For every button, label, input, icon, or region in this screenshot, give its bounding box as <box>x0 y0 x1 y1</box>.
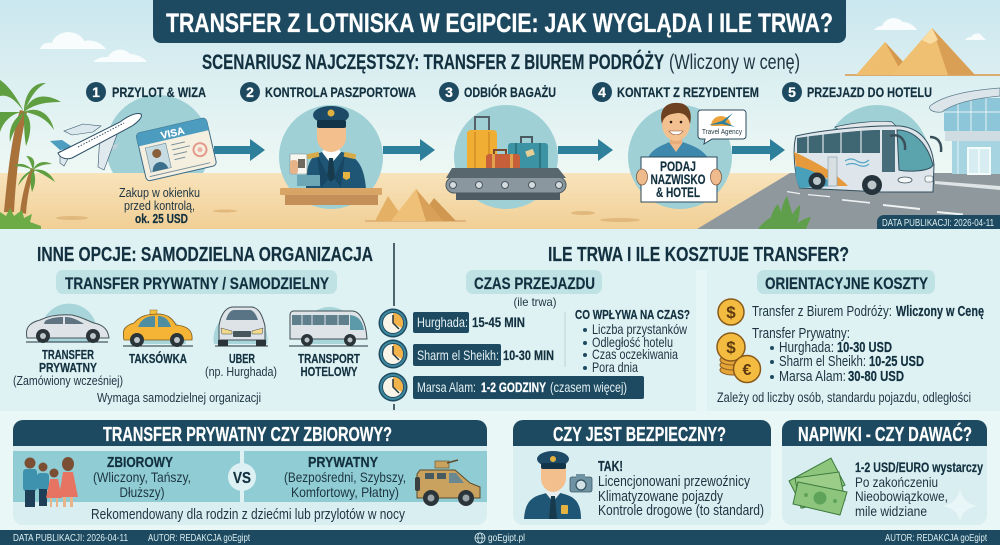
road <box>697 173 1000 229</box>
note: wymaga organizacji: Wymaga samodzielnej organizacji <box>97 390 261 405</box>
text: napiwki: Po zakończeniu <box>855 474 938 490</box>
text: zbiorowy: (Wliczony, Tańszy, <box>93 469 191 485</box>
icon: airport terminal <box>930 88 1000 174</box>
step 3 header: ODBIÓR BAGAŻU <box>464 83 556 100</box>
icon: family <box>23 457 78 507</box>
cost: transfer prywatny: Transfer Prywatny: <box>752 326 850 342</box>
icon: visa card <box>136 117 217 181</box>
row: hurghada: 15-45 MIN <box>472 314 525 330</box>
vehicle: uber <box>215 307 268 346</box>
text: prywatny: Komfortowy, Płatny) <box>291 484 399 500</box>
icon: coin stack: € <box>743 362 752 379</box>
sign: podaj nazwisko i hotel: PODAJ <box>660 159 696 174</box>
text: tak: Klimatyzowane pojazdy <box>598 489 724 505</box>
step 5 header: PRZEJAZD DO HOTELU <box>807 84 932 100</box>
footer: DATA PUBLIKACJI: 2026-04-11 <box>13 532 128 544</box>
icon: officer <box>524 451 581 519</box>
icon: pyramids top right <box>845 28 1000 75</box>
text: zbiorowy: Dłuższy) <box>120 484 164 500</box>
icon: banknotes <box>789 458 847 515</box>
sign: podaj nazwisko i hotel: NAZWISKO <box>650 172 706 187</box>
text: zbiorowy: ZBIOROWY <box>107 454 173 471</box>
icon: airplane <box>50 113 141 170</box>
text: rekomendowany: Rekomendowany dla rodzin z dziećmi lub przylotów w nocy <box>91 507 406 523</box>
title banner <box>153 0 846 43</box>
list: co wpływa na czas: CO WPŁYWA NA CZAS? <box>575 307 690 322</box>
note: ile trwa: (ile trwa) <box>514 295 556 309</box>
vehicle labels: HOTELOWY <box>300 365 358 379</box>
teal step circles <box>106 95 929 209</box>
icon: globe <box>475 533 485 543</box>
arrow 3 to 4 <box>558 139 613 161</box>
vehicle: taxi <box>123 310 193 347</box>
pill: orientacyjne koszty <box>757 270 935 294</box>
arrow 2 to 3 <box>383 139 435 161</box>
pill: orientacyjne koszty: ORIENTACYJNE KOSZTY <box>765 274 929 293</box>
subtitle: (Wliczony w cenę) <box>669 51 800 74</box>
clouds <box>40 18 986 62</box>
pill: transfer prywatny <box>56 270 337 294</box>
sign: podaj nazwisko i hotel <box>636 157 722 202</box>
step 2 header: KONTROLA PASZPORTOWA <box>265 84 416 100</box>
vehicle labels: (np. Hurghada) <box>205 365 277 379</box>
icon: armored vehicle <box>415 460 480 506</box>
step 1 caption: Zakup w okienku <box>119 185 200 200</box>
text: napiwki: Nieobowiązkowe, <box>855 488 948 504</box>
row: hurghada: Hurghada: <box>417 314 468 330</box>
icon: vs badge: VS <box>233 470 251 487</box>
icon: vs badge <box>228 463 256 491</box>
cost: transfer prywatny: Sharm el Sheikh: <box>779 354 866 370</box>
step 1 caption <box>119 185 200 226</box>
panel: czy bezpieczny <box>513 420 771 525</box>
text: napiwki: mile widziane <box>855 503 927 519</box>
step 4 header: KONTAKT Z REZYDENTEM <box>617 84 759 100</box>
step 3 header: 3 <box>445 84 453 100</box>
row: sharm el sheikh: Sharm el Sheikh: <box>417 347 499 363</box>
arrow 4 to 5 <box>732 139 785 161</box>
cost: transfer prywatny: Hurghada: <box>779 340 834 356</box>
text: prywatny: (Bezpośredni, Szybszy, <box>284 469 406 485</box>
step 2 header <box>240 82 416 102</box>
row: marsa alam: 1-2 GODZINY <box>481 379 546 395</box>
heading: inne opcje: INNE OPCJE: SAMODZIELNA ORGANIZACJA <box>37 244 373 266</box>
icon: small pyramids <box>365 189 466 221</box>
pill: transfer prywatny: TRANSFER PRYWATNY / SAMODZIELNY <box>65 274 330 293</box>
step 4 header <box>592 82 759 102</box>
speech bubble: travel agency <box>698 110 746 144</box>
step 5 header <box>782 82 932 102</box>
vehicle circles <box>41 304 356 344</box>
step 1 header: 1 <box>92 84 100 100</box>
icon: desk <box>280 188 382 205</box>
vehicle labels: TAKSÓWKA <box>129 351 187 366</box>
step 1 header <box>86 82 206 102</box>
icon: dollar coin <box>718 299 744 325</box>
vehicle: private car <box>26 315 109 343</box>
icon: coin stack: $ <box>726 338 736 357</box>
cost: transfer prywatny <box>752 326 924 385</box>
cost: transfer prywatny: Marsa Alam: <box>779 369 846 385</box>
footer <box>0 530 1000 545</box>
row: hurghada <box>413 312 525 333</box>
icon: agave plant <box>758 196 811 229</box>
row: marsa alam: Marsa Alam: <box>417 379 476 395</box>
text: prywatny <box>284 454 406 500</box>
vehicle labels: TRANSFER <box>42 348 94 362</box>
cost: transfer prywatny: 10-25 USD <box>869 354 924 370</box>
subtitle: SCENARIUSZ NAJCZĘSTSZY: TRANSFER Z BIUREM PODRÓŻY <box>202 50 664 74</box>
icon: visa card: VISA <box>160 126 186 142</box>
list: co wpływa na czas: Odległość hotelu <box>592 334 673 350</box>
icon: clock 1 <box>378 308 408 338</box>
icon: palm trees <box>0 80 61 229</box>
panel: czy bezpieczny: CZY JEST BEZPIECZNY? <box>553 424 726 446</box>
arrow 1 to 2 <box>214 139 265 161</box>
cost: biuro podróży: Transfer z Biurem Podróży: <box>752 304 892 320</box>
text: zbiorowy <box>93 454 191 500</box>
cost: transfer prywatny: 10-30 USD <box>837 340 892 356</box>
vehicle: hotel bus <box>289 311 368 346</box>
text: tak: Kontrole drogowe (to standard) <box>598 503 764 519</box>
icon: coin stack <box>717 333 760 382</box>
cost: transfer prywatny: 30-80 USD <box>848 369 904 385</box>
footer: goEgipt.pl <box>488 532 525 544</box>
icon: coach bus <box>794 121 941 195</box>
panel: napiwki <box>782 420 987 525</box>
icon: clock 2 <box>378 340 408 368</box>
text: tak: Licencjonowani przewoźnicy <box>598 474 751 490</box>
vehicle labels: TRANSPORT <box>298 352 360 366</box>
icon: dollar coin: $ <box>726 303 736 322</box>
icon: camera <box>570 474 592 492</box>
step 1 header: PRZYLOT & WIZA <box>112 84 206 100</box>
text: tak: TAK! <box>598 459 623 475</box>
title banner: TRANSFER Z LOTNISKA W EGIPCIE: JAK WYGLĄDA I ILE TRWA? <box>166 8 833 38</box>
pill: czas przejazdu: CZAS PRZEJAZDU <box>474 274 595 293</box>
vehicle labels <box>13 348 360 388</box>
step 2 header: 2 <box>246 84 254 100</box>
icon: resident <box>648 103 708 158</box>
step 4 header: 4 <box>598 84 606 100</box>
pill: czas przejazdu <box>466 270 602 294</box>
text: napiwki <box>855 460 983 519</box>
row: marsa alam: (czasem więcej) <box>550 379 627 395</box>
list: co wpływa na czas: Pora dnia <box>592 359 638 375</box>
list: co wpływa na czas <box>575 307 690 375</box>
text: prywatny: PRYWATNY <box>308 454 378 471</box>
icon: clock 3 <box>378 372 408 402</box>
text: tak <box>598 459 764 519</box>
vehicle labels: (Zamówiony wcześniej) <box>13 374 123 388</box>
list: co wpływa na czas: Liczba przystanków <box>592 321 688 337</box>
speech bubble: travel agency: Travel Agency <box>702 129 742 136</box>
icon: sparkle <box>943 488 977 522</box>
heading: ile trwa: ILE TRWA I ILE KOSZTUJE TRANSFER? <box>548 244 849 266</box>
icon: luggage on conveyor <box>446 117 566 200</box>
row: marsa alam <box>413 376 644 399</box>
panel: prywatny czy zbiorowy: TRANSFER PRYWATNY CZY ZBIOROWY? <box>103 424 392 446</box>
vehicle labels: PRYWATNY <box>39 361 98 375</box>
step 1 caption: ok. 25 USD <box>135 211 188 226</box>
step 1 caption: przed kontrolą, <box>124 198 195 213</box>
sign: podaj nazwisko i hotel: & HOTEL <box>656 185 700 200</box>
section divider <box>393 243 395 410</box>
icon: passport officer <box>290 106 366 189</box>
footer: AUTOR: REDAKCJA goEgipt <box>148 532 250 544</box>
panel: prywatny czy zbiorowy <box>13 420 487 525</box>
row: sharm el sheikh: 10-30 MIN <box>503 347 554 363</box>
vehicle labels: UBER <box>229 352 255 366</box>
list: co wpływa na czas: Czas oczekiwania <box>592 346 678 362</box>
step 5 header: 5 <box>788 84 796 100</box>
row: sharm el sheikh <box>413 344 554 366</box>
step 3 header <box>439 82 556 102</box>
scene: sky and sand background <box>0 0 1000 229</box>
